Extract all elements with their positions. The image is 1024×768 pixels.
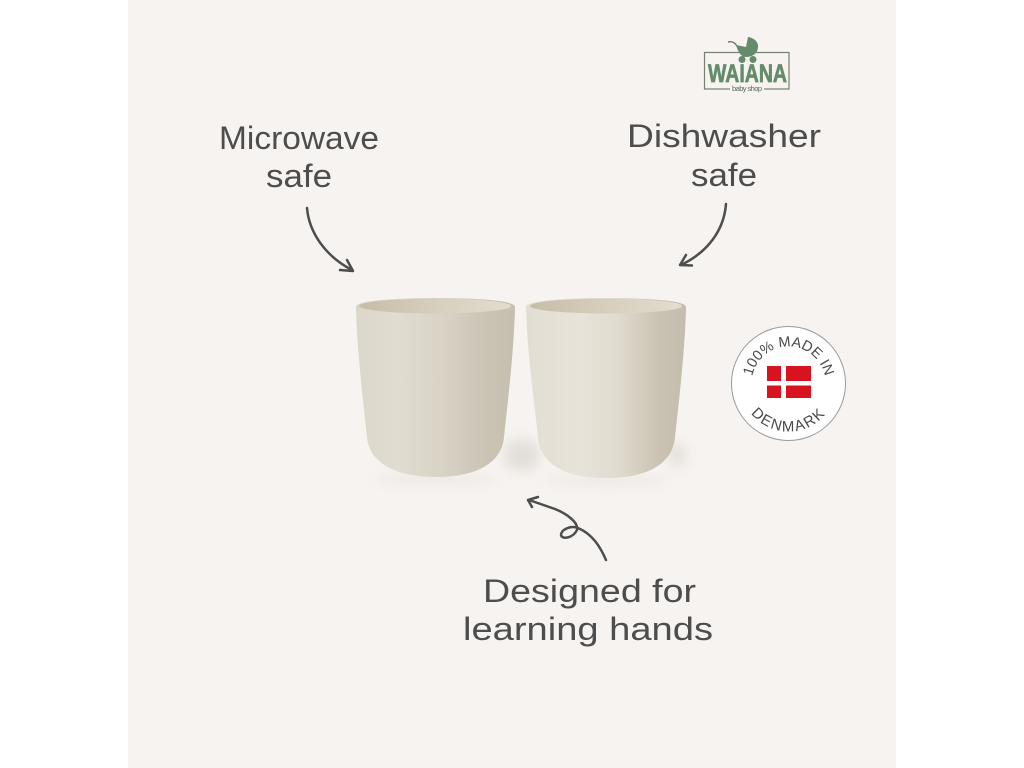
arrow: looped, to cup base [528,497,606,560]
badge: 100% made in Denmark [731,326,846,441]
label: Microwave safe: safe [266,158,332,194]
logo: Waiana baby shop: baby shop [732,84,762,93]
label: Designed for learning hands [463,573,713,647]
background panel [128,0,896,768]
badge: 100% made in Denmark: DENMARK [752,407,825,432]
arrow: Microwave to cup [307,208,353,271]
arrow: Dishwasher to cup [680,204,726,266]
label: Dishwasher safe [627,118,821,193]
badge: 100% made in Denmark: 100% MADE IN [744,336,834,376]
logo: Waiana baby shop [704,37,789,93]
label: Dishwasher safe: Dishwasher [627,118,821,154]
label: Designed for learning hands: learning hands [463,611,713,647]
logo: Waiana baby shop: WAIANA [708,60,787,88]
label: Microwave safe: Microwave [219,120,379,156]
label: Microwave safe [219,120,379,194]
cup: right [526,298,686,478]
label: Dishwasher safe: safe [691,157,757,193]
cup: left [356,298,515,477]
label: Designed for learning hands: Designed for [483,573,696,609]
flag: Denmark [767,366,811,398]
cups shadow [373,439,686,483]
